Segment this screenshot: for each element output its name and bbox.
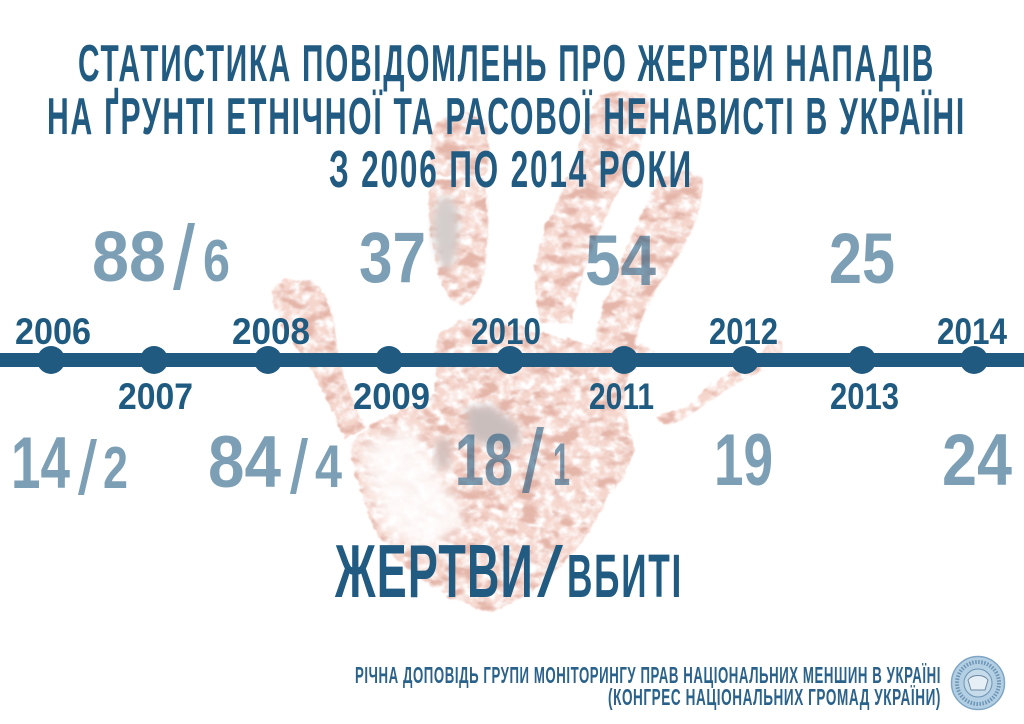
year labels: 2011 [589,376,654,417]
slash 2008 [290,438,308,494]
values above the timeline: 6 [203,228,230,294]
timeline axis [0,346,1024,374]
source text [355,662,941,710]
year labels: 2007 [118,376,193,417]
values above the timeline: 25 [829,220,895,299]
dark patch: palm left [436,438,450,468]
year labels: 2008 [232,311,310,352]
values below the timeline: 14 [11,423,70,504]
dark patch: palm [466,405,520,447]
year labels: 2014 [937,311,1007,352]
values below the timeline: 1 [553,431,570,498]
year labels: 2009 [353,376,430,417]
values below the timeline: 84 [208,422,281,503]
values above the timeline [92,218,895,301]
values below the timeline: 2 [103,435,128,501]
slash 2006 [78,439,97,495]
legend slash [537,545,563,597]
palm highlight [358,425,465,555]
values above the timeline: 54 [585,222,656,301]
year labels [15,311,1007,417]
dark patch: finger [434,197,458,269]
year labels: 2013 [830,376,899,417]
values below the timeline: 19 [714,420,773,501]
year labels: 2012 [709,311,778,352]
values below the timeline: 24 [942,420,1012,501]
year labels: 2006 [15,311,91,352]
icon: organisation seal [952,656,1004,710]
values below the timeline [11,420,1012,504]
slash 2007 [173,223,195,290]
values above the timeline: 37 [359,219,426,298]
legend: victims / killed: ВБИТІ [567,542,683,610]
values below the timeline: 4 [315,433,343,500]
handprint illustration [272,91,783,613]
title: З 2006 ПО 2014 РОКИ [329,141,693,199]
values below the timeline: 18 [455,420,513,501]
title [47,35,966,199]
legend: victims / killed: ЖЕРТВИ [334,529,534,613]
values above the timeline: 88 [92,218,166,297]
slash 2010 [522,427,544,493]
year labels: 2010 [471,311,541,352]
